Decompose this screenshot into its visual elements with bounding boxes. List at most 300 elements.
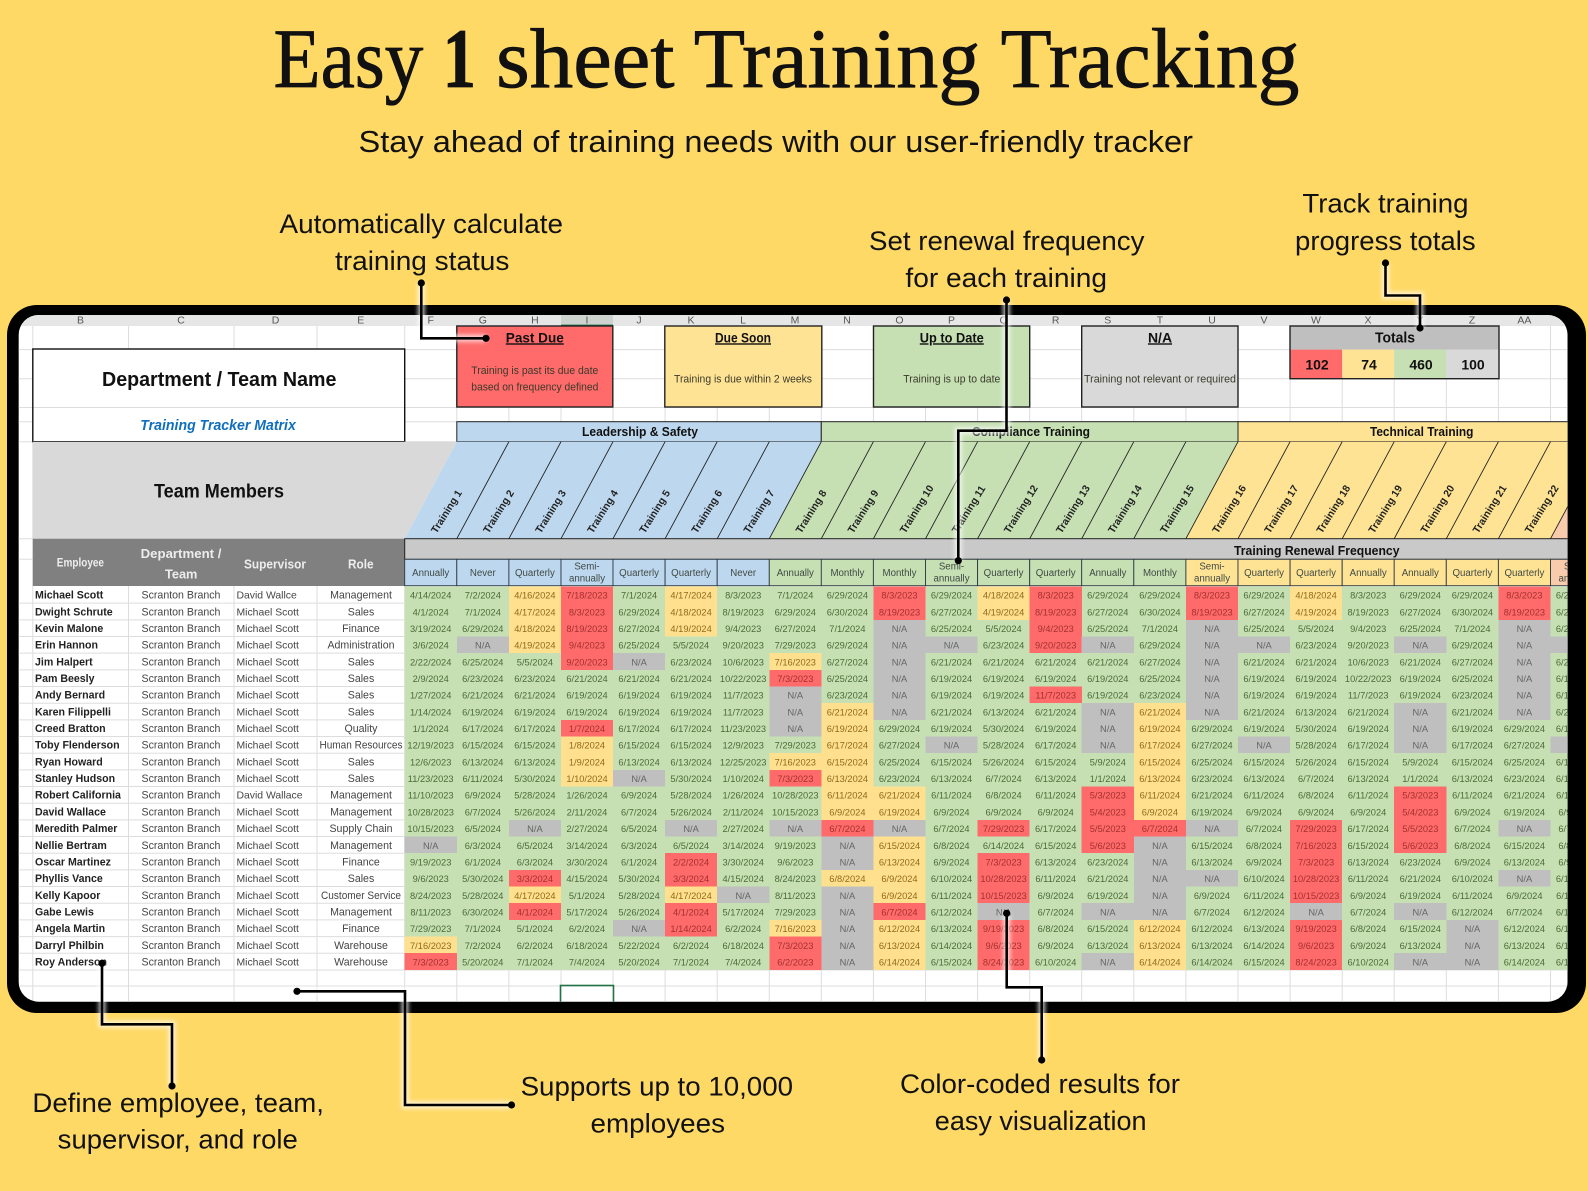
- row: Nellie Bertram: N/A: [840, 841, 856, 851]
- row: Jim Halpert: 6/21/2024: [983, 657, 1024, 667]
- department title box: Training Tracker Matrix: [140, 417, 296, 434]
- row: Creed Bratton: 6/17/2024: [514, 724, 556, 734]
- row: Toby Flenderson: 6/15/2024: [618, 741, 660, 751]
- row: Andy Bernard: 6/19/2024: [1243, 691, 1285, 701]
- row: Karen Filippelli: 6/19/2024: [618, 707, 660, 717]
- row: Ryan Howard: 6/15/2024: [1348, 757, 1389, 767]
- row: Dwight Schrute: 6/27/2024: [931, 607, 972, 617]
- row: David Wallace: 5/4/2023: [1402, 807, 1438, 817]
- row: Erin Hannon: N/A: [1256, 641, 1273, 651]
- row: Phyllis Vance: N/A: [1152, 874, 1168, 884]
- row: Kevin Malone: 6/25/2024: [931, 624, 972, 634]
- row: Roy Anderson: 7/4/2024: [569, 957, 605, 967]
- row: Kelly Kapoor: 6/9/2024: [881, 891, 918, 901]
- row: Kelly Kapoor: 6/19/2024: [1400, 891, 1441, 901]
- row: Gabe Lewis: 6/12/2024: [1243, 907, 1285, 917]
- title: 1: [443, 12, 476, 106]
- row: Oscar Martinez: 2/2/2024: [673, 857, 709, 867]
- row: Roy Anderson: 6/15/2024: [931, 957, 972, 967]
- row: Kelly Kapoor: 6/9/2024: [1194, 891, 1230, 901]
- row: Robert California: 6/11/2024: [827, 791, 868, 801]
- row: Karen Filippelli: Sales: [348, 706, 374, 718]
- callout: set renewal frequency: for each training: [905, 263, 1107, 293]
- row: Kelly Kapoor: Scranton Branch: [142, 890, 221, 902]
- row: Kelly Kapoor: 8/11/2023: [775, 891, 816, 901]
- row: Oscar Martinez: 6/13/2024: [1035, 857, 1076, 867]
- row: Creed Bratton: 6/29/2024: [1191, 724, 1233, 734]
- row: Gabe Lewis: 6/12/2024: [931, 907, 972, 917]
- row: Robert California: Management: [330, 790, 392, 802]
- row: Angela Martin: 6/12/2024: [1191, 924, 1233, 934]
- row: Andy Bernard: Sales: [348, 690, 374, 702]
- row: Dwight Schrute: 4/19/2024: [1295, 607, 1337, 617]
- row: Toby Flenderson: N/A: [1100, 741, 1116, 751]
- row: Meredith Palmer: 7/29/2023: [1295, 824, 1337, 834]
- renewal frequency cells: Monthly: [830, 568, 865, 579]
- row: Gabe Lewis: [35, 903, 1588, 920]
- row: Michael Scott: 8/3/2023: [1038, 591, 1074, 601]
- row: Darryl Philbin: N/A: [1465, 941, 1481, 951]
- column letter header: Y: [1416, 314, 1424, 326]
- row: Stanley Hudson: [35, 770, 1588, 787]
- row: Kelly Kapoor: Michael Scott: [236, 891, 299, 902]
- row: Erin Hannon: Erin Hannon: [35, 640, 98, 652]
- row: David Wallace: 6/19/2024: [1191, 807, 1233, 817]
- slanted training headers: Training 7: [742, 488, 777, 536]
- row: Darryl Philbin: 7/3/2023: [777, 941, 813, 951]
- row: Jim Halpert: 9/20/2023: [566, 657, 608, 667]
- row: Pam Beesly: 6/19/2024: [1243, 674, 1285, 684]
- row: Michael Scott: 8/3/2023: [1506, 591, 1543, 601]
- row: Dwight Schrute: 8/19/2023: [1035, 607, 1076, 617]
- row: Robert California: 1/26/2024: [566, 791, 608, 801]
- row: Toby Flenderson: 6/27/2024: [879, 741, 920, 751]
- column letter header: K: [687, 314, 695, 326]
- department title box: Department / Team Name: [102, 369, 336, 391]
- row: Darryl Philbin: Darryl Philbin: [35, 940, 104, 952]
- row: Meredith Palmer: 5/5/2023: [1402, 824, 1438, 834]
- row: Michael Scott: 8/3/2023: [1350, 591, 1386, 601]
- row: Dwight Schrute: 6/29/2024: [618, 607, 660, 617]
- row: David Wallace: 6/19/2024: [1504, 807, 1545, 817]
- row: Toby Flenderson: 6/27/2024: [1191, 741, 1233, 751]
- row: Toby Flenderson: 6/17/2024: [827, 741, 868, 751]
- row: Nellie Bertram: N/A: [423, 841, 439, 851]
- row: Darryl Philbin: 6/13/2024: [1087, 941, 1128, 951]
- renewal frequency cells: annually: [569, 574, 605, 585]
- title: Easy: [274, 12, 424, 106]
- row: Robert California: 6/11/2024: [1348, 791, 1389, 801]
- row: Nellie Bertram: 6/8/2024: [933, 841, 970, 851]
- row: Michael Scott: [35, 586, 1588, 603]
- row: Kelly Kapoor: 6/9/2024: [1038, 891, 1074, 901]
- row: Roy Anderson: 5/20/2024: [462, 957, 503, 967]
- row: Erin Hannon: 6/25/2024: [618, 641, 660, 651]
- row: Nellie Bertram: 9/19/2023: [775, 841, 816, 851]
- legend: due soon: Training is due within 2 weeks: [674, 374, 812, 386]
- row: Robert California: 6/11/2024: [931, 791, 972, 801]
- row: Toby Flenderson: 12/9/2023: [723, 741, 764, 751]
- row: Stanley Hudson: 6/7/2024: [1298, 774, 1334, 784]
- row: Phyllis Vance: 6/9/2024: [881, 874, 918, 884]
- column letter header: C: [177, 314, 185, 326]
- row: Phyllis Vance: 3/3/2024: [673, 874, 709, 884]
- row: Nellie Bertram: Michael Scott: [236, 841, 299, 852]
- row: Gabe Lewis: N/A: [1100, 907, 1116, 917]
- row: Angela Martin: Scranton Branch: [142, 923, 221, 935]
- row: Gabe Lewis: 6/7/2024: [881, 907, 918, 917]
- row: Roy Anderson: 6/10/2024: [1035, 957, 1076, 967]
- row: Ryan Howard: 6/25/2024: [879, 757, 920, 767]
- row: Creed Bratton: 1/1/2024: [413, 724, 449, 734]
- row: Roy Anderson: 7/3/2023: [413, 957, 449, 967]
- row: Oscar Martinez: Michael Scott: [236, 857, 299, 868]
- renewal frequency cells: Annually: [1089, 568, 1127, 579]
- row: Pam Beesly: Sales: [348, 673, 374, 685]
- row: David Wallace: 6/19/2024: [879, 807, 920, 817]
- column heading bar: [33, 539, 405, 586]
- row: Stanley Hudson: 6/13/2024: [1035, 774, 1076, 784]
- row: Pam Beesly: 10/22/2023: [720, 674, 766, 684]
- row: Creed Bratton: 6/29/2024: [879, 724, 920, 734]
- row: Meredith Palmer: 6/5/2024: [621, 824, 657, 834]
- category headers: Leadership & Safety: [582, 424, 699, 439]
- row: Meredith Palmer: 6/17/2024: [1035, 824, 1076, 834]
- slanted training headers: Training 21: [1471, 483, 1510, 536]
- totals panel: 102: [1305, 356, 1329, 372]
- column letter header: D: [272, 314, 280, 326]
- row: Andy Bernard: 6/19/2024: [1087, 691, 1128, 701]
- row: Roy Anderson: 7/1/2024: [673, 957, 709, 967]
- row: Dwight Schrute: 8/19/2023: [1348, 607, 1389, 617]
- row: Dwight Schrute: 4/18/2024: [670, 607, 712, 617]
- row: Kevin Malone: N/A: [892, 624, 908, 634]
- row: Jim Halpert: Sales: [348, 656, 374, 668]
- row: David Wallace: 10/28/2023: [407, 807, 454, 817]
- subtitle: Stay ahead of training needs with our user-friendly tracker: [358, 124, 1193, 159]
- row: Creed Bratton: 6/19/2024: [931, 724, 972, 734]
- row: Gabe Lewis: 6/7/2024: [1506, 907, 1543, 917]
- row: Angela Martin: Michael Scott: [236, 924, 299, 935]
- row: Karen Filippelli: 6/21/2024: [1348, 707, 1389, 717]
- row: Andy Bernard: 6/21/2024: [514, 691, 556, 701]
- row: Darryl Philbin: 6/14/2024: [931, 941, 972, 951]
- row: Toby Flenderson: Michael Scott: [236, 741, 299, 752]
- row: Kelly Kapoor: 4/17/2024: [514, 891, 556, 901]
- row: Pam Beesly: 6/19/2024: [1035, 674, 1076, 684]
- slanted training headers: [405, 442, 1588, 539]
- row: Oscar Martinez: 6/13/2024: [1191, 857, 1233, 867]
- column letter header: U: [1208, 314, 1216, 326]
- row: Karen Filippelli: N/A: [1100, 707, 1116, 717]
- row: Kevin Malone: 6/25/2024: [1243, 624, 1285, 634]
- row: David Wallace: 2/11/2024: [723, 807, 764, 817]
- row: Dwight Schrute: Dwight Schrute: [35, 606, 113, 618]
- row: Andy Bernard: Andy Bernard: [35, 690, 105, 702]
- row: Nellie Bertram: 5/6/2023: [1090, 841, 1126, 851]
- row: Phyllis Vance: 6/21/2024: [1087, 874, 1128, 884]
- row: Robert California: 6/11/2024: [1140, 791, 1180, 801]
- row: Roy Anderson: 6/10/2024: [1348, 957, 1389, 967]
- slanted training headers: Training 8: [794, 488, 830, 536]
- row: Nellie Bertram: 6/15/2024: [1191, 841, 1233, 851]
- row: Erin Hannon: 4/19/2024: [514, 641, 556, 651]
- row: Phyllis Vance: Scranton Branch: [142, 873, 221, 885]
- row: Meredith Palmer: Meredith Palmer: [35, 823, 117, 835]
- row: Phyllis Vance: 6/10/2024: [1243, 874, 1285, 884]
- row: David Wallace: 6/9/2024: [985, 807, 1022, 817]
- row: Oscar Martinez: 6/13/2024: [1348, 857, 1389, 867]
- row: Ryan Howard: Scranton Branch: [142, 756, 221, 768]
- callout: supports up to 10,000 employees: employees: [590, 1109, 725, 1139]
- row: Stanley Hudson: 11/23/2023: [408, 774, 454, 784]
- row: Nellie Bertram: 5/6/2023: [1402, 841, 1438, 851]
- row: Roy Anderson: Roy Anderson: [35, 956, 107, 968]
- legend: up to date: Up to Date: [920, 329, 984, 345]
- row: Pam Beesly: N/A: [1517, 674, 1533, 684]
- row: Gabe Lewis: N/A: [840, 907, 856, 917]
- row: Darryl Philbin: 6/13/2024: [1191, 941, 1233, 951]
- row: Kelly Kapoor: 6/11/2024: [1452, 891, 1493, 901]
- row: Kevin Malone: N/A: [1517, 624, 1533, 634]
- row: Oscar Martinez: 9/19/2023: [410, 857, 451, 867]
- row: Angela Martin: 6/15/2024: [1400, 924, 1441, 934]
- row: Oscar Martinez: 6/13/2024: [1504, 857, 1545, 867]
- renewal frequency cells: Quarterly: [1036, 568, 1076, 579]
- row: Creed Bratton: 6/17/2024: [670, 724, 712, 734]
- row: Erin Hannon: 7/29/2023: [775, 641, 816, 651]
- row: Dwight Schrute: 6/30/2024: [1139, 607, 1181, 617]
- column letter header: G: [479, 314, 487, 326]
- row: Gabe Lewis: 4/1/2024: [673, 907, 709, 917]
- row: Darryl Philbin: 7/16/2023: [410, 941, 451, 951]
- row: Meredith Palmer: N/A: [892, 824, 908, 834]
- row: Kevin Malone: 6/25/2024: [1400, 624, 1441, 634]
- row: Andy Bernard: N/A: [788, 691, 804, 701]
- row: Andy Bernard: 6/19/2024: [931, 691, 972, 701]
- row: Karen Filippelli: [35, 703, 1588, 720]
- slanted training headers: Training 5: [638, 488, 673, 536]
- callout: color-coded results: [900, 910, 1180, 1136]
- column letter header: S: [1104, 314, 1111, 326]
- row: Toby Flenderson: Human Resources: [320, 740, 402, 752]
- row: Phyllis Vance: 6/10/2024: [1452, 874, 1493, 884]
- row: Dwight Schrute: 8/3/2023: [569, 607, 605, 617]
- row: Meredith Palmer: N/A: [788, 824, 804, 834]
- column letter header: H: [531, 314, 539, 326]
- row: Michael Scott: 7/2/2024: [465, 591, 501, 601]
- row: Roy Anderson: 6/14/2024: [1504, 957, 1545, 967]
- row: Angela Martin: N/A: [840, 924, 856, 934]
- slanted training headers: Training 1: [430, 488, 465, 536]
- row: Nellie Bertram: 3/14/2024: [723, 841, 764, 851]
- row: Dwight Schrute: 4/1/2024: [413, 607, 449, 617]
- row: Jim Halpert: 5/5/2024: [517, 657, 553, 667]
- row: Oscar Martinez: 6/3/2024: [517, 857, 553, 867]
- callout: supports up to 10,000 employees: Supports up to 10,000: [521, 1072, 793, 1102]
- row: Kevin Malone: 9/4/2023: [1350, 624, 1386, 634]
- row: Gabe Lewis: 6/7/2024: [1038, 907, 1074, 917]
- row: Toby Flenderson: 5/28/2024: [1295, 741, 1337, 751]
- row: Dwight Schrute: 8/19/2023: [723, 607, 764, 617]
- row: Phyllis Vance: [35, 870, 1588, 887]
- renewal frequency cells: Annually: [777, 568, 814, 579]
- row: Karen Filippelli: 6/21/2024: [1035, 707, 1076, 717]
- legend: up to date: [874, 326, 1030, 407]
- row: Jim Halpert: 6/21/2024: [1400, 657, 1441, 667]
- renewal frequency cells: Quarterly: [1452, 568, 1492, 579]
- row: Kelly Kapoor: 6/11/2024: [1244, 891, 1284, 901]
- row: Kevin Malone: 6/27/2024: [775, 624, 816, 634]
- row: Jim Halpert: 6/21/2024: [1295, 657, 1337, 667]
- row: Phyllis Vance: Phyllis Vance: [35, 873, 103, 885]
- row: Ryan Howard: 7/16/2023: [775, 757, 816, 767]
- row: Creed Bratton: Scranton Branch: [142, 723, 221, 735]
- row: Oscar Martinez: 6/9/2024: [1454, 857, 1491, 867]
- column letter header: I: [586, 314, 588, 326]
- callout: define employee team supervisor role: Define employee, team,: [32, 1088, 324, 1118]
- row: Roy Anderson: Michael Scott: [236, 957, 299, 968]
- row: Kelly Kapoor: N/A: [840, 891, 856, 901]
- row: Kevin Malone: 6/27/2024: [618, 624, 660, 634]
- row: Stanley Hudson: 6/13/2024: [1139, 774, 1181, 784]
- team members block: Team Members: [154, 481, 284, 502]
- callout: automatically calculate training status: training status: [335, 246, 509, 276]
- row: Roy Anderson: 7/1/2024: [517, 957, 553, 967]
- row: Nellie Bertram: 3/14/2024: [566, 841, 608, 851]
- row: Meredith Palmer: Michael Scott: [236, 824, 299, 835]
- callout: track training progress totals: progress totals: [1295, 226, 1476, 256]
- row: Kevin Malone: 9/4/2023: [1038, 624, 1074, 634]
- row: Pam Beesly: Scranton Branch: [142, 673, 221, 685]
- row: Stanley Hudson: 6/7/2024: [985, 774, 1022, 784]
- row: Michael Scott: 4/18/2024: [1295, 591, 1337, 601]
- row: Angela Martin: 6/8/2024: [1350, 924, 1386, 934]
- row: Robert California: 6/8/2024: [1298, 791, 1334, 801]
- row: Robert California: 6/9/2024: [621, 791, 657, 801]
- row: Roy Anderson: 8/24/2023: [1295, 957, 1337, 967]
- row: Pam Beesly: 6/19/2024: [931, 674, 972, 684]
- row: Creed Bratton: 6/19/2024: [1348, 724, 1389, 734]
- column letter header: F: [427, 314, 434, 326]
- row: Dwight Schrute: 7/1/2024: [465, 607, 501, 617]
- row: Meredith Palmer: 2/27/2024: [723, 824, 764, 834]
- row: Darryl Philbin: 6/9/2024: [1038, 941, 1074, 951]
- row: Kelly Kapoor: Customer Service: [321, 890, 401, 902]
- row: Erin Hannon: N/A: [1204, 641, 1221, 651]
- row: Andy Bernard: 6/19/2024: [566, 691, 608, 701]
- row: Kelly Kapoor: 4/17/2024: [670, 891, 712, 901]
- row: Darryl Philbin: 6/13/2024: [1400, 941, 1441, 951]
- row: Kevin Malone: 6/29/2024: [462, 624, 503, 634]
- row: Kelly Kapoor: N/A: [1152, 891, 1168, 901]
- tablet frame: [7, 305, 1586, 1013]
- row: Gabe Lewis: N/A: [1152, 907, 1168, 917]
- renewal frequency cells: annually: [1194, 574, 1230, 585]
- renewal frequency cells: Semi-: [939, 561, 964, 572]
- row: Angela Martin: 6/15/2024: [1087, 924, 1128, 934]
- row: Gabe Lewis: 8/11/2023: [410, 907, 451, 917]
- row: Darryl Philbin: 6/13/2024: [1504, 941, 1545, 951]
- row: Phyllis Vance: 3/3/2024: [517, 874, 553, 884]
- row: Karen Filippelli: Michael Scott: [236, 707, 299, 718]
- row: Pam Beesly: 6/21/2024: [618, 674, 660, 684]
- row: Toby Flenderson: 6/27/2024: [1504, 741, 1545, 751]
- row: Pam Beesly: 6/19/2024: [983, 674, 1024, 684]
- row: Darryl Philbin: 7/2/2024: [465, 941, 501, 951]
- row: Stanley Hudson: Stanley Hudson: [35, 773, 115, 785]
- row: Erin Hannon: 6/23/2024: [1295, 641, 1337, 651]
- row: Creed Bratton: 6/19/2024: [1035, 724, 1076, 734]
- row: Ryan Howard: 1/9/2024: [569, 757, 605, 767]
- row: Phyllis Vance: 8/24/2023: [775, 874, 816, 884]
- renewal frequency cells: Monthly: [1143, 568, 1177, 579]
- row: Ryan Howard: 6/15/2024: [931, 757, 972, 767]
- row: Phyllis Vance: 6/21/2024: [1400, 874, 1441, 884]
- row: Toby Flenderson: N/A: [944, 741, 960, 751]
- row: Andy Bernard: N/A: [1204, 691, 1221, 701]
- row: David Wallace: 6/9/2024: [829, 807, 866, 817]
- row: Jim Halpert: 6/21/2024: [1087, 657, 1128, 667]
- row: David Wallace: 5/26/2024: [514, 807, 556, 817]
- row: Stanley Hudson: 7/3/2023: [777, 774, 813, 784]
- row: Angela Martin: Angela Martin: [35, 923, 105, 935]
- row: David Wallace: 6/9/2024: [1454, 807, 1491, 817]
- row: Robert California: 5/3/2023: [1090, 791, 1126, 801]
- slanted training headers: Training 12: [1003, 483, 1041, 536]
- row: Erin Hannon: Scranton Branch: [142, 640, 221, 652]
- row: Darryl Philbin: 6/14/2024: [1243, 941, 1285, 951]
- row: Stanley Hudson: 6/13/2024: [827, 774, 868, 784]
- row: Creed Bratton: 6/17/2024: [618, 724, 660, 734]
- row: Andy Bernard: 6/19/2024: [1295, 691, 1337, 701]
- row: Karen Filippelli: 6/21/2024: [827, 707, 868, 717]
- row: Darryl Philbin: 6/18/2024: [566, 941, 608, 951]
- row: Dwight Schrute: 6/30/2024: [827, 607, 868, 617]
- renewal frequency cells: Quarterly: [1504, 568, 1544, 579]
- row: Roy Anderson: 6/2/2023: [777, 957, 813, 967]
- row: Jim Halpert: 6/25/2024: [462, 657, 503, 667]
- row: David Wallace: Michael Scott: [236, 807, 299, 818]
- row: Michael Scott: 7/18/2023: [566, 591, 608, 601]
- row: Kevin Malone: [35, 620, 1588, 637]
- row: Oscar Martinez: Finance: [342, 856, 380, 868]
- row: Dwight Schrute: 8/19/2023: [1191, 607, 1233, 617]
- row: Kelly Kapoor: 5/28/2024: [618, 891, 660, 901]
- row: Creed Bratton: Quality: [345, 723, 378, 735]
- row: Phyllis Vance: Sales: [348, 873, 374, 885]
- row: Ryan Howard: 5/9/2024: [1090, 757, 1126, 767]
- row: Oscar Martinez: [35, 853, 1588, 870]
- row: Toby Flenderson: 6/17/2024: [1452, 741, 1493, 751]
- row: Erin Hannon: 6/29/2024: [827, 641, 868, 651]
- row: Michael Scott: 8/3/2023: [1194, 591, 1230, 601]
- callout: track training progress totals: Track training: [1302, 189, 1468, 219]
- row: David Wallace: 10/15/2023: [772, 807, 819, 817]
- row: Robert California: [35, 787, 1588, 803]
- row: Angela Martin: 6/2/2024: [725, 924, 761, 934]
- row: Kelly Kapoor: 5/1/2024: [569, 891, 605, 901]
- row: Darryl Philbin: 6/18/2024: [723, 941, 764, 951]
- row: Oscar Martinez: 6/23/2024: [1087, 857, 1128, 867]
- row: Meredith Palmer: 2/27/2024: [566, 824, 608, 834]
- row: Darryl Philbin: [35, 937, 1588, 953]
- row: Karen Filippelli: 11/7/2023: [723, 707, 764, 717]
- renewal frequency cells: Annually: [1350, 568, 1387, 579]
- row: Meredith Palmer: 10/15/2023: [407, 824, 454, 834]
- spreadsheet screen: [18, 314, 1588, 1004]
- row: Robert California: 6/9/2024: [465, 791, 501, 801]
